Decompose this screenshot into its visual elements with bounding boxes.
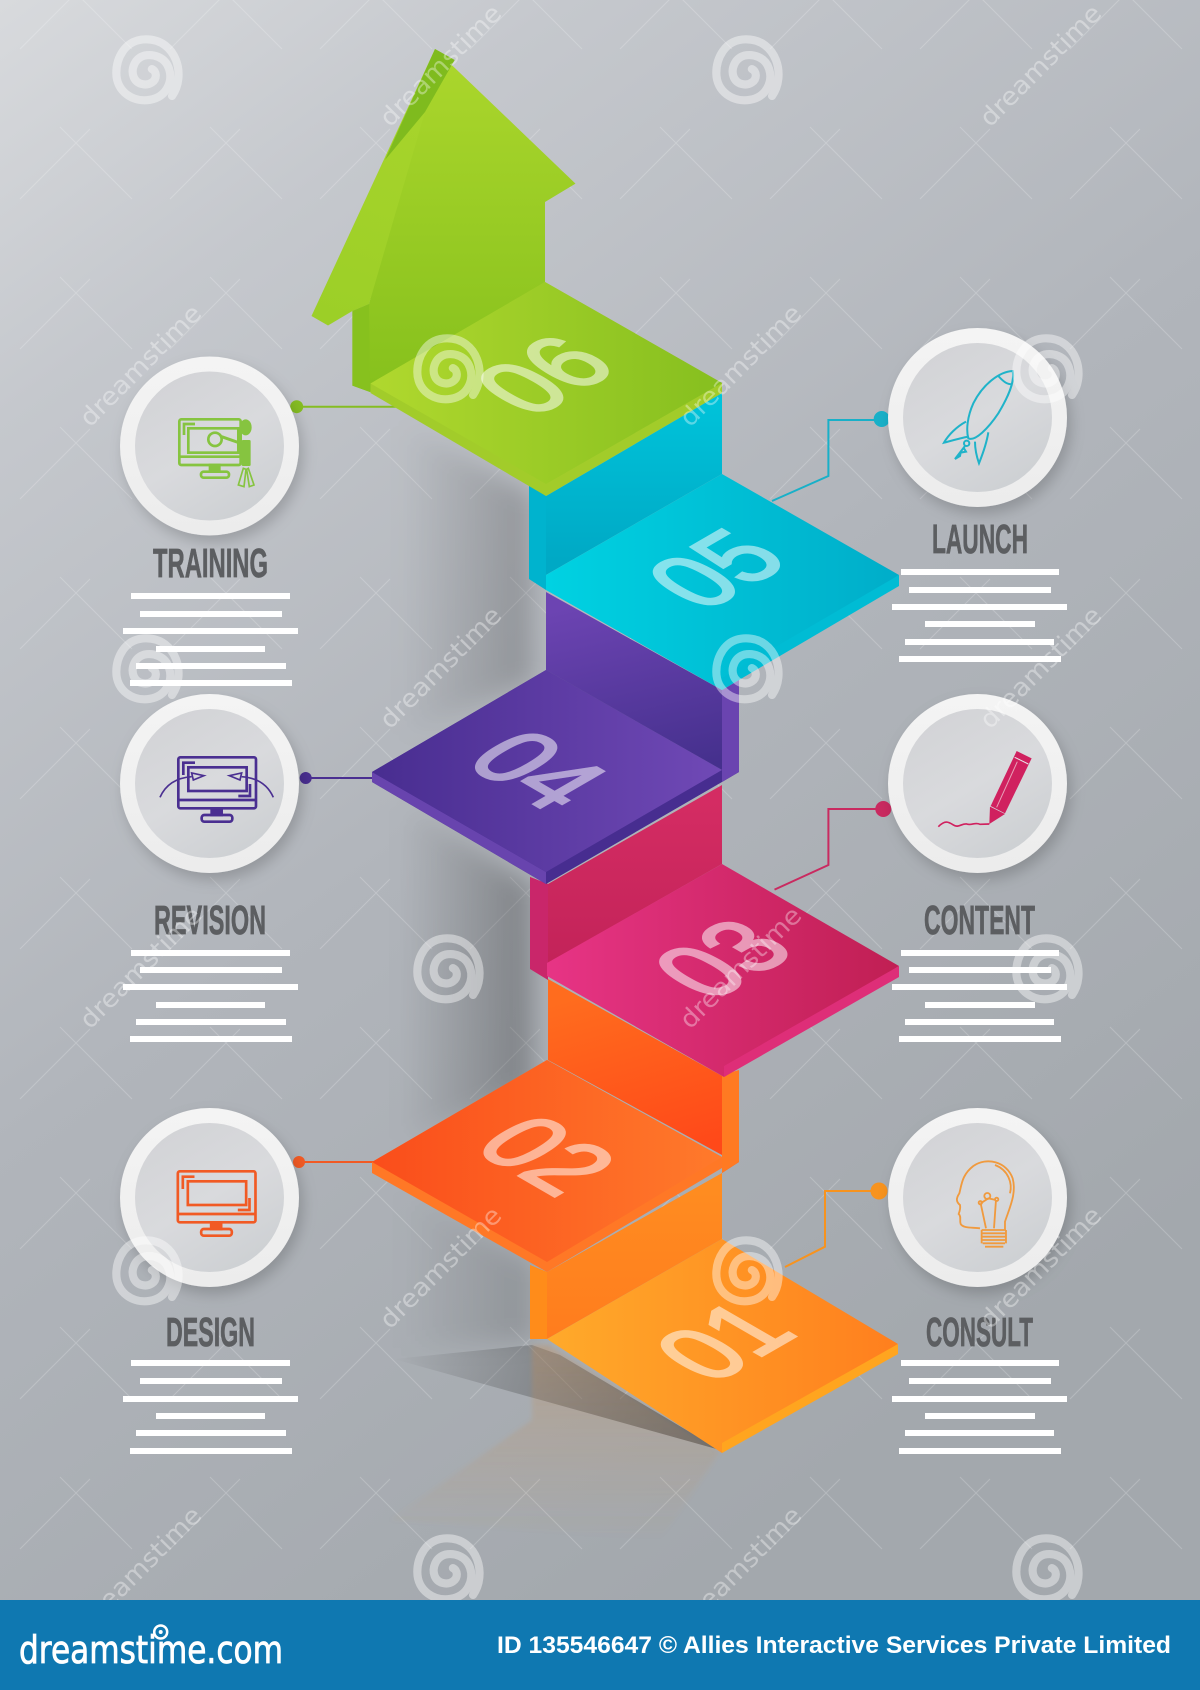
panel: revision <box>120 694 385 1042</box>
watermark: text: dreamstime <box>74 901 207 1034</box>
connector: revision <box>300 772 385 784</box>
panel: design <box>120 1108 385 1454</box>
watermark: text: dreamstime <box>674 901 807 1034</box>
footer credit: ID 135546647 © Allies Interactive Services Private Limited <box>497 1632 1171 1659</box>
riser 05 <box>529 393 722 590</box>
riser 04 <box>546 592 739 782</box>
text lines: content <box>892 950 1067 1042</box>
plate 01 <box>547 1239 898 1453</box>
number 05: 05 <box>621 514 811 624</box>
plate 02 <box>372 1060 722 1272</box>
stair: step 04 <box>372 592 739 884</box>
icon: head bulb <box>957 1161 1014 1247</box>
circle: design <box>120 1108 299 1287</box>
arrow head and shaft <box>312 49 576 392</box>
watermark: text: dreamstime <box>74 299 207 432</box>
plate 05 <box>546 474 899 690</box>
text lines: launch <box>892 569 1067 662</box>
watermark: text: dreamstime <box>674 299 807 432</box>
icon: monitor with arrows <box>160 757 273 822</box>
icon: rocket <box>944 371 1013 463</box>
connector: consult <box>785 1182 888 1267</box>
watermark: text: dreamstime <box>974 1201 1107 1334</box>
label: launch: LAUNCH <box>932 516 1028 562</box>
label: revision: REVISION <box>154 897 266 943</box>
circle: training <box>120 356 299 536</box>
riser 02 <box>548 979 739 1173</box>
number 01: 01 <box>629 1286 819 1396</box>
riser 01 <box>530 1173 722 1339</box>
riser 03 <box>530 785 722 980</box>
watermark: text: dreamstime <box>974 0 1107 132</box>
watermark: text: dreamstime <box>74 1501 207 1634</box>
panel: launch <box>772 328 1067 662</box>
text lines: design <box>123 1360 298 1454</box>
plate 04 <box>372 670 722 884</box>
ground shadow <box>390 1345 720 1540</box>
watermark: spirals <box>116 39 1079 1599</box>
connector: design <box>293 1156 385 1168</box>
panel: content <box>774 694 1067 1042</box>
watermark: text: dreamstime <box>374 0 507 132</box>
plate 03 <box>547 864 899 1077</box>
watermark: text: dreamstime <box>374 1201 507 1334</box>
text lines: training <box>123 593 298 686</box>
connector: launch <box>772 411 890 501</box>
number 04: 04 <box>443 715 633 825</box>
number 03: 03 <box>627 904 817 1014</box>
label: consult: CONSULT <box>926 1309 1033 1355</box>
stair shadows <box>385 420 532 1350</box>
footer bar <box>0 1600 1200 1690</box>
stair: step 01 <box>530 1173 898 1453</box>
text lines: revision <box>123 950 298 1042</box>
number 02: 02 <box>452 1100 642 1210</box>
stair: step 06 arrow <box>312 49 722 496</box>
circle: launch <box>888 328 1067 507</box>
circle: content <box>888 694 1067 873</box>
connector: content <box>774 801 891 890</box>
number 06: 06 <box>449 320 639 430</box>
panel: consult <box>785 1108 1067 1454</box>
panel: training <box>120 356 405 686</box>
icon: pencil <box>938 751 1032 827</box>
stair: step 03 <box>530 785 899 1077</box>
circle: consult <box>888 1108 1067 1287</box>
label: design: DESIGN <box>166 1309 255 1355</box>
connector: training <box>290 400 405 413</box>
icon: monitor <box>178 1171 255 1236</box>
watermark: text: dreamstime <box>374 601 507 734</box>
text lines: consult <box>892 1360 1067 1454</box>
watermark: text: dreamstime <box>674 1501 807 1634</box>
label: content: CONTENT <box>924 897 1035 943</box>
plate 06 <box>370 282 722 496</box>
watermark: text: dreamstime <box>974 601 1107 734</box>
label: training: TRAINING <box>153 540 268 586</box>
circle: revision <box>120 694 299 873</box>
footer logo: dreamstime.com <box>19 1628 283 1672</box>
stair: step 02 <box>372 979 739 1272</box>
icon: presenter at monitor <box>179 419 254 487</box>
stair: step 05 <box>529 393 899 690</box>
